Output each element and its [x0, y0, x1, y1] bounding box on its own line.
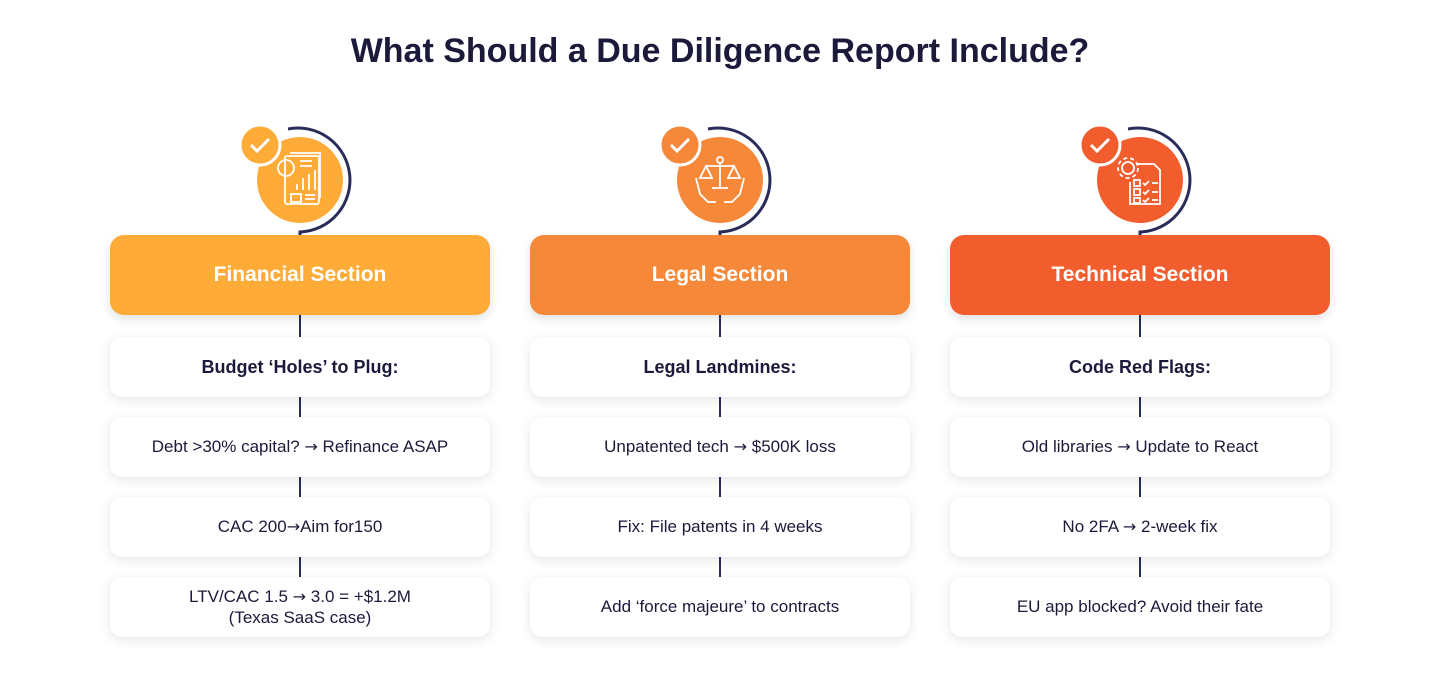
card: No 2FA → 2-week fix: [1062, 517, 1218, 536]
card: LTV/CAC 1.5 → 3.0 = +$1.2M: [189, 587, 411, 606]
icon: checklist gear: [1082, 126, 1192, 235]
card: [110, 577, 490, 637]
card: [950, 337, 1330, 397]
card: [530, 337, 910, 397]
header: financial: Financial Section: [214, 263, 386, 286]
card: [530, 497, 910, 557]
card: EU app blocked? Avoid their fate: [1017, 597, 1263, 616]
card: [110, 497, 490, 557]
header: technical: Technical Section: [1052, 263, 1228, 286]
card: [110, 417, 490, 477]
card: Debt >30% capital? → Refinance ASAP: [152, 437, 448, 456]
icon: scales: [662, 126, 772, 235]
card: Old libraries → Update to React: [1022, 437, 1258, 456]
card: [950, 577, 1330, 637]
card: Legal Landmines:: [643, 357, 797, 377]
card: [950, 497, 1330, 557]
card: [530, 577, 910, 637]
panel: financial: [107, 126, 493, 642]
header: legal: Legal Section: [652, 263, 788, 286]
panel: technical: [947, 126, 1333, 642]
header: financial: [110, 235, 490, 315]
panel: legal: [527, 126, 913, 642]
card: Add ‘force majeure’ to contracts: [601, 597, 839, 616]
header: legal: [530, 235, 910, 315]
card: Unpatented tech → $500K loss: [604, 437, 836, 456]
card: Budget ‘Holes’ to Plug:: [202, 357, 398, 377]
card: (Texas SaaS case): [229, 608, 371, 627]
header: technical: [950, 235, 1330, 315]
card: Code Red Flags:: [1069, 357, 1211, 377]
card: Fix: File patents in 4 weeks: [617, 517, 823, 536]
card: CAC 200→Aim for150: [218, 517, 382, 536]
title: What Should a Due Diligence Report Include?: [351, 32, 1089, 70]
card: [110, 337, 490, 397]
card: [950, 417, 1330, 477]
icon: financial report: [242, 126, 352, 235]
card: [530, 417, 910, 477]
